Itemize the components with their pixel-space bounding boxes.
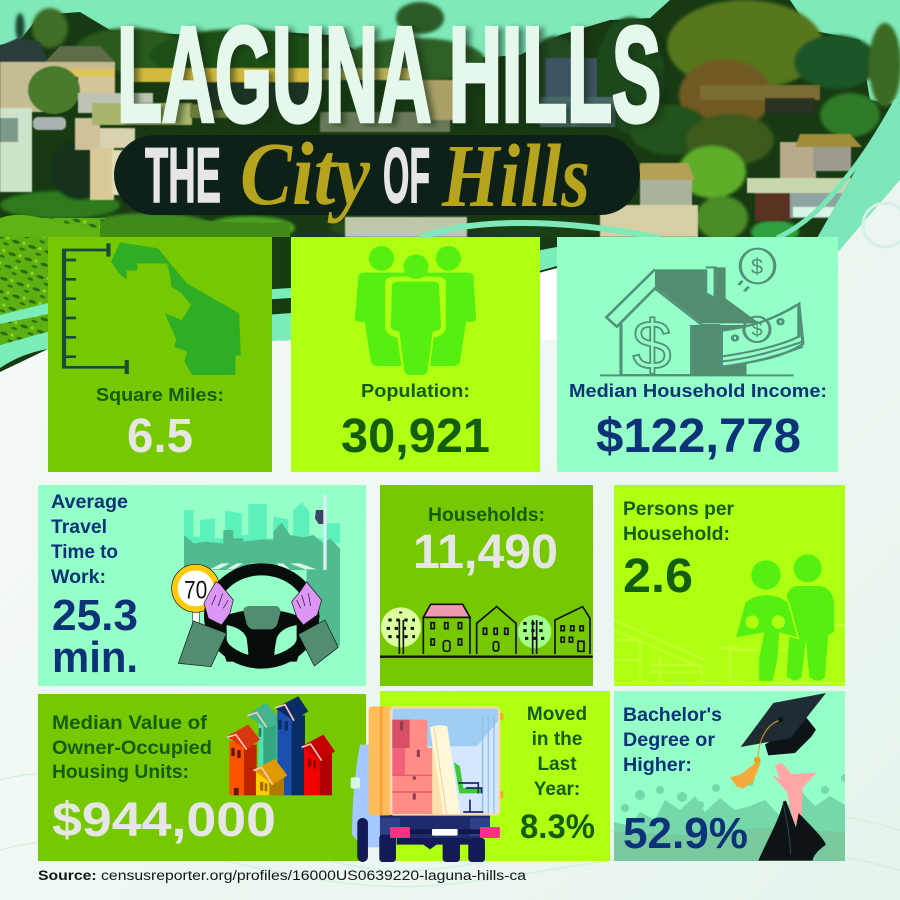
icon: house with money: $	[751, 319, 763, 341]
label: Moved	[527, 704, 587, 725]
label: Households:	[428, 505, 545, 526]
value: 11,490	[413, 526, 558, 579]
value: 52.9%	[623, 809, 748, 858]
label: Housing Units:	[52, 762, 189, 783]
label: Household:	[623, 524, 730, 545]
crowd silhouette	[614, 774, 849, 861]
icon: house with money: $	[751, 254, 763, 279]
label	[623, 705, 722, 776]
label: Time to	[51, 542, 118, 563]
icon: house with money	[600, 249, 803, 384]
value	[52, 591, 138, 682]
icon: couple	[735, 554, 834, 682]
panel: square miles	[48, 237, 272, 472]
subtitle banner: OF	[383, 131, 430, 219]
illustration: moving truck	[351, 706, 503, 862]
label: Bachelor's	[623, 705, 722, 726]
panel: median household income	[557, 237, 838, 472]
illustration: colourful houses	[227, 696, 335, 795]
illustration: row of houses and trees	[380, 604, 593, 657]
label: Travel	[51, 517, 107, 538]
panel: population	[291, 237, 540, 472]
label: Population:	[361, 381, 470, 401]
label	[51, 492, 128, 588]
panel: persons per household	[614, 485, 845, 686]
hillside photograph	[0, 0, 900, 380]
panel: average travel time	[38, 485, 366, 686]
label: Last	[537, 754, 577, 775]
label: Year:	[534, 779, 580, 800]
label	[52, 713, 212, 783]
panel: households	[380, 485, 593, 686]
icon: house with money: $	[633, 306, 671, 384]
label: Average	[51, 492, 128, 513]
icon: three people	[355, 246, 476, 378]
value: $944,000	[52, 794, 276, 847]
panel: median value of housing	[38, 694, 366, 861]
subtitle word: City: City	[240, 125, 371, 224]
label: Owner-Occupied	[52, 738, 212, 759]
label: Degree or	[623, 730, 716, 751]
label: in the	[532, 729, 582, 750]
subtitle word: Hills: Hills	[441, 127, 590, 226]
source line: Source: censusreporter.org/profiles/16000US0639220-laguna-hills-ca	[38, 868, 527, 883]
value: 8.3%	[520, 808, 595, 846]
label: Median Household Income:	[569, 381, 827, 401]
icon: city map with ruler	[64, 242, 241, 375]
panel: moved in the last year	[380, 691, 610, 861]
mint swoosh bands	[0, 92, 900, 368]
label: Higher:	[623, 755, 692, 776]
illustration: hands on steering wheel: 70	[184, 576, 207, 604]
subtitle banner	[114, 125, 640, 226]
value: min.	[52, 633, 138, 682]
label	[623, 499, 735, 545]
value: 6.5	[127, 410, 193, 463]
illustration: mortarboard and raised hand	[730, 693, 826, 861]
panel: bachelor's degree or higher	[614, 691, 849, 861]
value: 2.6	[623, 550, 693, 603]
value: $122,778	[596, 410, 801, 463]
label: Square Miles:	[96, 385, 224, 405]
value: 25.3	[52, 591, 138, 640]
subtitle banner: THE	[145, 131, 221, 219]
label: Work:	[51, 567, 106, 588]
label: Persons per	[623, 499, 735, 520]
value: 30,921	[341, 410, 490, 463]
label	[527, 704, 587, 800]
label: Median Value of	[52, 713, 208, 734]
faint house line art	[614, 620, 845, 684]
illustration: hands on steering wheel	[172, 495, 340, 667]
